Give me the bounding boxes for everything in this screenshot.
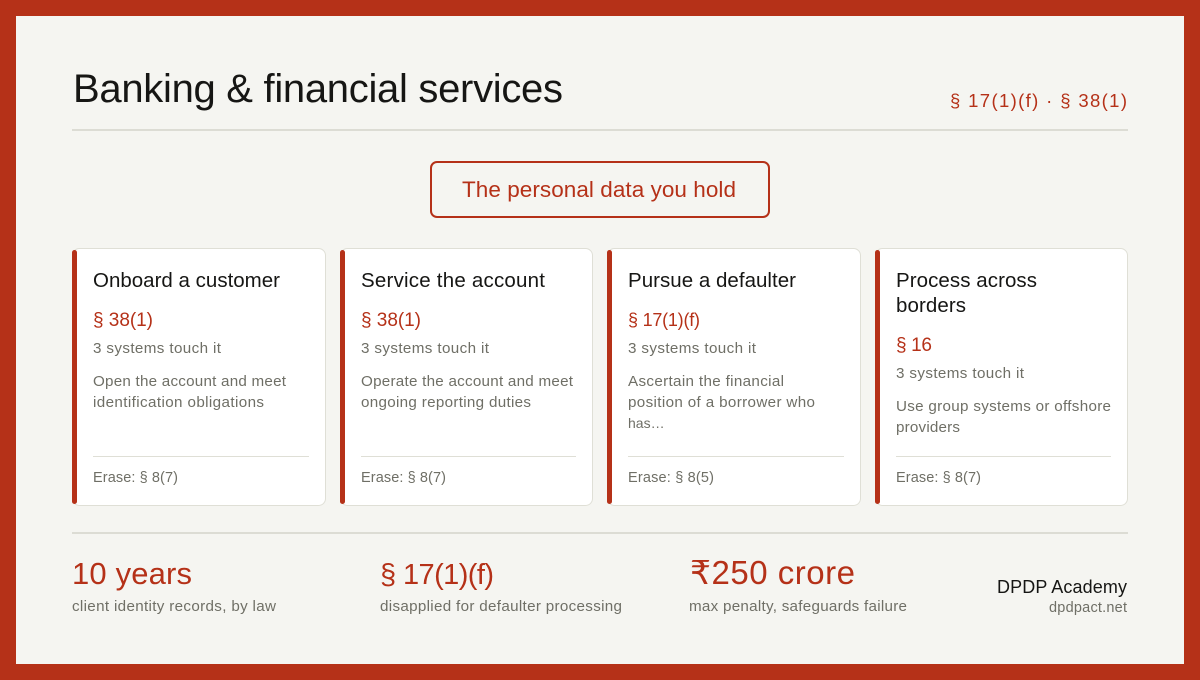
description: Open the account and meet	[93, 373, 287, 390]
accent bar	[72, 250, 77, 504]
erase reference: Erase: § 8(7)	[361, 470, 446, 486]
description	[896, 398, 1111, 436]
description	[361, 373, 574, 411]
section: § 17(1)(f)	[628, 310, 700, 330]
stat: penalty: max penalty, safeguards failure	[689, 598, 907, 615]
accent bar	[607, 250, 612, 504]
panel: process across borders	[875, 248, 1128, 506]
stat: retention: client identity records, by law	[72, 598, 276, 615]
description: Operate the account and meet	[361, 373, 574, 390]
central data box	[431, 162, 769, 217]
accent bar	[875, 250, 880, 504]
accent bar	[340, 250, 345, 504]
description: Use group systems or offshore	[896, 398, 1111, 415]
section: § 16	[896, 335, 932, 356]
description: Ascertain the financial	[628, 373, 784, 390]
panel: pursue a defaulter	[607, 248, 860, 506]
stat: retention: 10 years	[72, 556, 192, 591]
stat: retention	[72, 556, 276, 615]
section: § 38(1)	[361, 310, 421, 331]
panel: service the account	[340, 248, 592, 506]
title: Banking & financial services	[73, 67, 563, 111]
card title: Onboard a customer	[93, 269, 280, 292]
card title	[896, 269, 1037, 317]
stat: disapplied section	[380, 559, 622, 615]
stat: penalty	[689, 554, 907, 615]
panel: onboard a customer	[72, 248, 326, 506]
section references: § 17(1)(f) · § 38(1)	[950, 90, 1127, 111]
systems count: 3 systems touch it	[896, 365, 1025, 382]
description: identification obligations	[93, 394, 264, 411]
card title: borders	[896, 294, 966, 317]
erase reference: Erase: § 8(7)	[896, 470, 981, 486]
card title: Service the account	[361, 269, 545, 292]
description: providers	[896, 419, 960, 436]
description: position of a borrower who	[628, 394, 815, 411]
brand: dpdpact.net	[1049, 600, 1127, 616]
card title: Process across	[896, 269, 1037, 292]
section: § 38(1)	[93, 310, 153, 331]
systems count: 3 systems touch it	[361, 340, 490, 357]
stat: penalty: ₹250 crore	[690, 554, 855, 591]
stat: disapplied section: disapplied for defaulter processing	[380, 598, 622, 615]
brand	[997, 577, 1127, 616]
central data box: The personal data you hold	[462, 177, 736, 202]
description: ongoing reporting duties	[361, 394, 531, 411]
brand: DPDP Academy	[997, 577, 1127, 597]
description: has…	[628, 415, 665, 431]
description	[93, 373, 287, 411]
description	[628, 373, 815, 431]
card title: Pursue a defaulter	[628, 269, 796, 292]
erase reference: Erase: § 8(5)	[628, 470, 714, 486]
stat: disapplied section: § 17(1)(f)	[380, 559, 494, 591]
erase reference: Erase: § 8(7)	[93, 470, 178, 486]
systems count: 3 systems touch it	[628, 340, 757, 357]
systems count: 3 systems touch it	[93, 340, 222, 357]
